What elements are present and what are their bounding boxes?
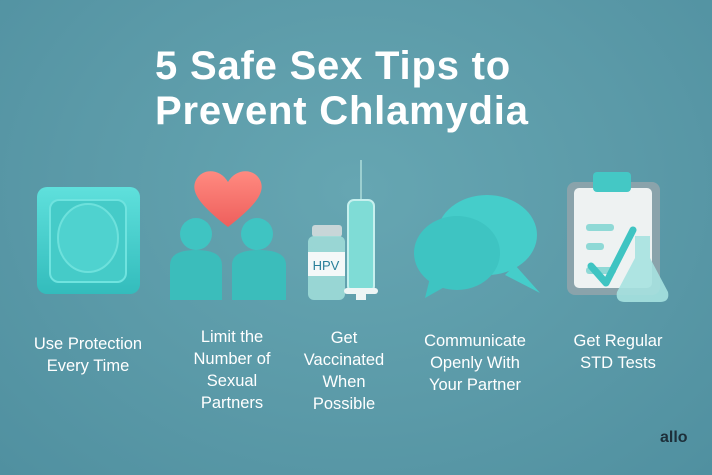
title: 5 Safe Sex Tips to <box>155 44 511 88</box>
label: vaccinated: Vaccinated <box>304 351 384 369</box>
label: vaccinated <box>304 329 384 413</box>
label: vaccinated: Possible <box>313 395 375 413</box>
label: protection <box>34 335 142 375</box>
label: partners <box>193 328 271 412</box>
title: Prevent Chlamydia <box>155 89 529 133</box>
icon: HPV vaccine: HPV <box>313 258 340 273</box>
icon: heart and partners <box>170 171 286 300</box>
label: protection: Every Time <box>47 357 129 375</box>
label: tests: Get Regular <box>574 332 662 350</box>
label: communicate <box>424 332 526 394</box>
icon: HPV vaccine <box>308 160 378 300</box>
icon: clipboard and flask <box>567 172 668 302</box>
label: tests: STD Tests <box>580 354 656 372</box>
label: partners: Partners <box>201 394 263 412</box>
label: protection: Use Protection <box>34 335 142 353</box>
label: communicate: Communicate <box>424 332 526 350</box>
label: partners: Number of <box>193 350 271 368</box>
title <box>155 44 529 133</box>
label: partners: Limit the <box>201 328 263 346</box>
label: communicate: Your Partner <box>429 376 521 394</box>
logo: allo <box>660 429 688 446</box>
label: partners: Sexual <box>207 372 257 390</box>
icon: condom packet <box>37 187 140 294</box>
label: vaccinated: When <box>322 373 366 391</box>
icon: speech bubbles <box>414 195 540 298</box>
label: tests <box>574 332 662 372</box>
label: vaccinated: Get <box>331 329 357 347</box>
label: communicate: Openly With <box>430 354 520 372</box>
